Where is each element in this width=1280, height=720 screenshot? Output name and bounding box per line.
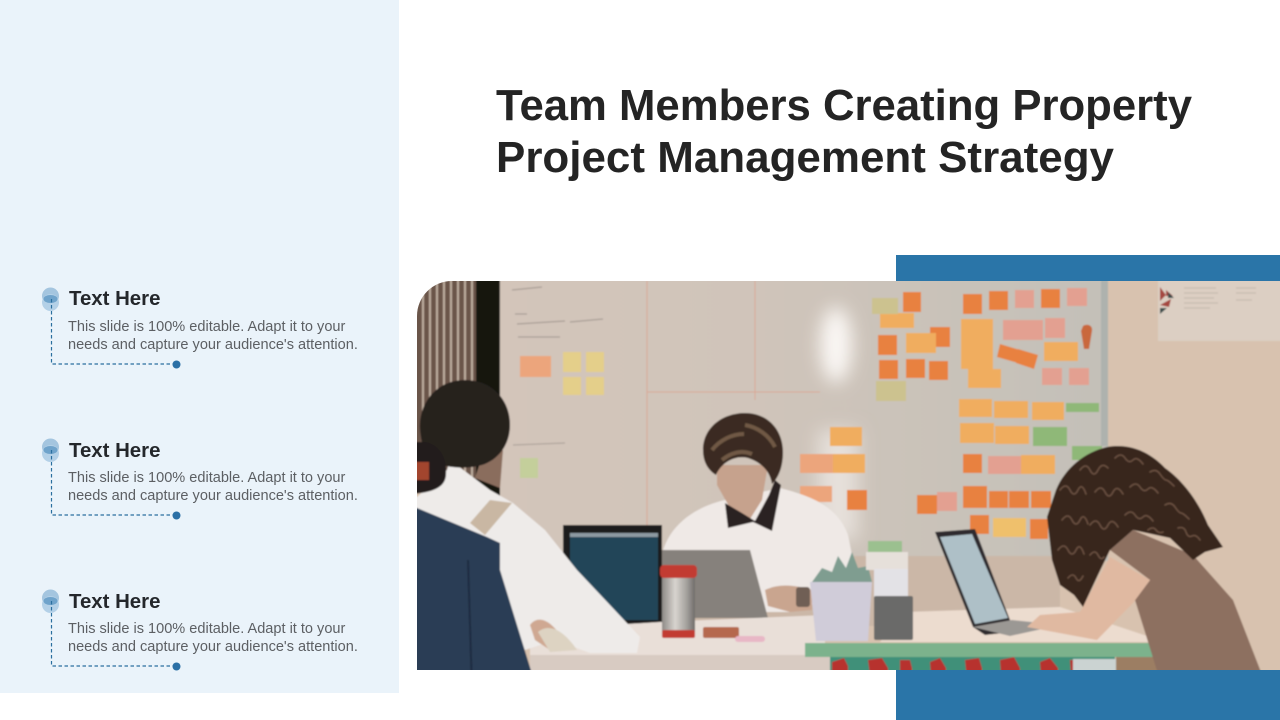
body text: needs and capture your audience's attention. <box>68 639 358 655</box>
laptop center <box>660 550 768 618</box>
heading: Text Here <box>69 591 160 613</box>
body text: needs and capture your audience's attention. <box>68 488 358 504</box>
body text: needs and capture your audience's attention. <box>68 337 358 353</box>
man from behind with jacket <box>417 379 640 670</box>
body text <box>68 470 358 504</box>
panel: left sidebar <box>0 0 399 693</box>
text item 2 <box>42 438 358 520</box>
laptop left <box>563 525 662 625</box>
table right <box>880 607 1165 642</box>
icon: overlapping circles with dashed connector <box>42 288 180 368</box>
plant pot <box>810 552 872 641</box>
accent bar: top blue band <box>896 255 1280 281</box>
whiteboard glare <box>818 307 858 540</box>
wall <box>417 281 1280 670</box>
poster and logo <box>1158 281 1280 341</box>
body text: This slide is 100% editable. Adapt it to your <box>68 319 345 335</box>
heading: Text Here <box>69 440 160 462</box>
table main <box>530 615 826 656</box>
green table edge <box>804 642 1158 670</box>
title <box>496 81 1193 182</box>
icon: overlapping circles with dashed connector <box>42 590 180 670</box>
body text <box>68 319 358 353</box>
striped column and dark frame <box>417 281 501 496</box>
body text: This slide is 100% editable. Adapt it to your <box>68 470 345 486</box>
heading: Text Here <box>69 288 160 310</box>
body text: This slide is 100% editable. Adapt it to your <box>68 621 345 637</box>
body text <box>68 621 358 655</box>
title: Team Members Creating Property <box>496 81 1193 130</box>
woman: torso and arm <box>1027 529 1261 670</box>
center man <box>661 413 856 612</box>
laptop right <box>934 528 1040 636</box>
sticky notes: board <box>520 288 1102 539</box>
text item 3 <box>42 590 358 670</box>
whiteboard <box>500 260 1108 626</box>
travel mug <box>660 565 697 638</box>
icon: overlapping circles with dashed connector <box>42 438 180 520</box>
text item 1 <box>42 288 358 368</box>
woman: curly hair <box>1047 446 1223 607</box>
small items on table <box>703 627 765 642</box>
photo: team working at table in front of whiteboard <box>417 281 1280 670</box>
title: Project Management Strategy <box>496 133 1115 182</box>
mesh pen cup <box>874 596 913 640</box>
paper cup and stack <box>866 541 908 597</box>
accent bar: bottom blue band <box>896 670 1280 720</box>
